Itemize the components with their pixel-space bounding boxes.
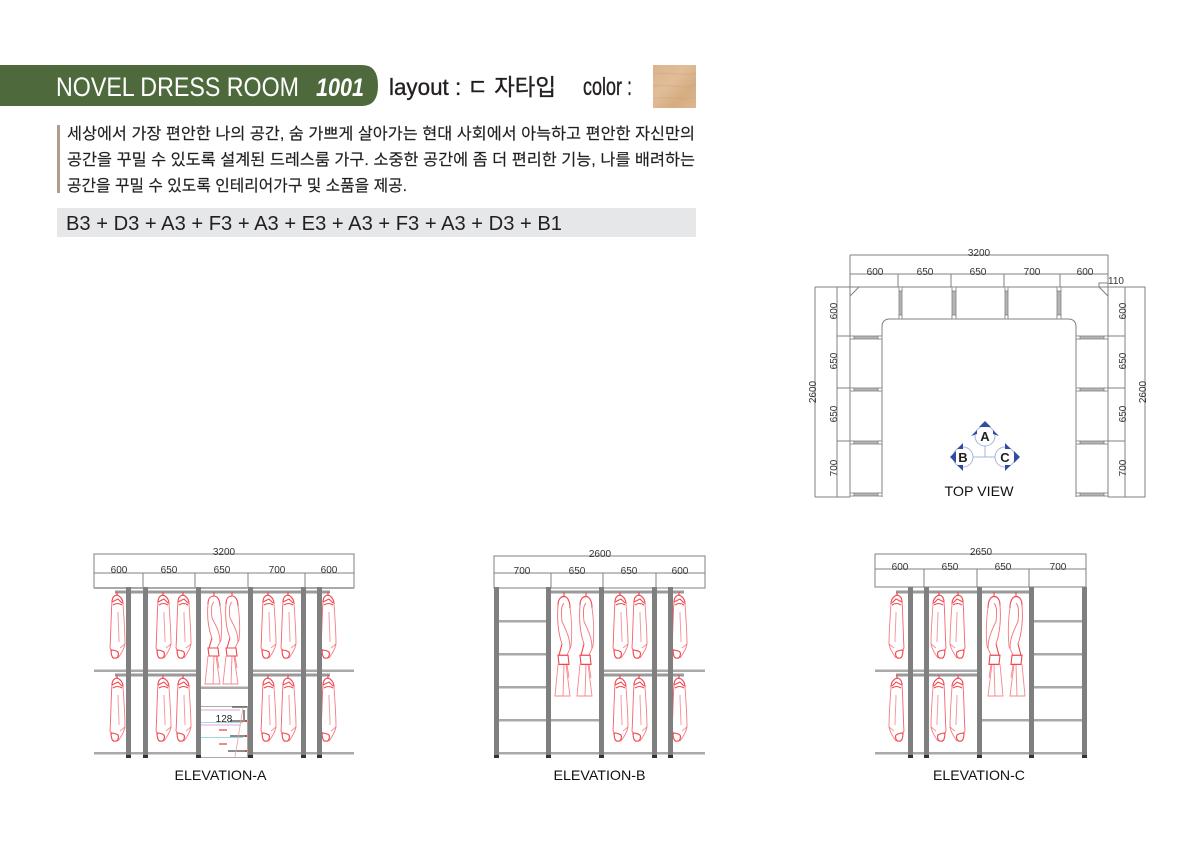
plan partitions <box>853 290 1105 496</box>
top panel with dimensions <box>875 547 1086 587</box>
caption: ELEVATION-A <box>174 767 267 783</box>
plan dimensions: 650 <box>917 267 934 278</box>
plan dimensions: 3200 <box>968 248 991 259</box>
posts <box>126 587 322 758</box>
description block: 공간을 꾸밀 수 있도록 설계된 드레스룸 가구. 소중한 공간에 좀 더 편리한 기능, 나를 배려하는 <box>67 151 695 169</box>
elevation A <box>94 547 354 783</box>
icon: view direction key: A <box>980 429 990 444</box>
color label: color : <box>583 73 632 101</box>
top panel with dimensions: 600 <box>892 562 909 573</box>
description block: 세상에서 가장 편안한 나의 공간, 숨 가쁘게 살아가는 현대 사회에서 아늑하고 편안한 자신만의 <box>67 125 695 143</box>
top panel with dimensions <box>494 549 705 588</box>
header banner <box>0 65 378 106</box>
drawer unit <box>200 706 248 758</box>
plan dimensions: 600 <box>829 302 840 319</box>
icon: view direction key: C <box>1000 450 1010 465</box>
plan dimensions: 600 <box>1077 267 1094 278</box>
module formula bar: B3 + D3 + A3 + F3 + A3 + E3 + A3 + F3 + A3 + D3 + B1 <box>66 213 562 235</box>
module formula bar <box>57 208 696 237</box>
plan dimensions: 110 <box>1108 276 1124 287</box>
drawer unit: 128 <box>216 714 233 725</box>
icon: view direction key <box>950 421 1020 471</box>
plan dimensions: 700 <box>1024 267 1041 278</box>
posts <box>494 587 673 758</box>
shelves and rods <box>494 590 705 754</box>
plan dimensions: 650 <box>1118 352 1129 369</box>
top panel with dimensions: 600 <box>672 566 689 577</box>
top panel with dimensions: 650 <box>569 566 586 577</box>
top panel with dimensions: 650 <box>942 562 959 573</box>
caption: ELEVATION-C <box>933 767 1025 783</box>
plan dimensions: 650 <box>829 352 840 369</box>
plan dimensions: 600 <box>867 267 884 278</box>
plan dimensions: 700 <box>829 459 840 476</box>
top panel with dimensions <box>94 547 354 588</box>
top panel with dimensions: 700 <box>269 565 286 576</box>
plan walls <box>815 255 1145 497</box>
plan dimensions: 2600 <box>1138 380 1149 403</box>
plan dimensions: 650 <box>829 405 840 422</box>
garments <box>110 592 336 741</box>
color swatch: wood <box>653 65 696 108</box>
garments <box>555 592 687 741</box>
shelves and rods <box>94 587 354 754</box>
top panel with dimensions: 700 <box>1050 562 1067 573</box>
top panel with dimensions: 700 <box>514 566 531 577</box>
elevation C <box>875 547 1087 783</box>
layout label: layout : ㄷ 자타입 <box>389 74 556 100</box>
description block <box>57 125 695 195</box>
plan dimensions <box>808 248 1149 476</box>
top panel with dimensions: 600 <box>111 565 128 576</box>
top panel with dimensions: 650 <box>161 565 178 576</box>
top panel with dimensions: 650 <box>214 565 231 576</box>
top view caption: TOP VIEW <box>944 483 1014 499</box>
top panel with dimensions: 650 <box>621 566 638 577</box>
description block: 공간을 꾸밀 수 있도록 인테리어가구 및 소품을 제공. <box>67 177 407 195</box>
model number: 1001 <box>316 74 364 102</box>
plan connectors <box>850 287 1108 496</box>
top panel with dimensions: 2600 <box>589 549 612 560</box>
plan dimensions: 650 <box>1118 405 1129 422</box>
elevation B <box>494 549 705 783</box>
shelves and rods <box>875 590 1084 754</box>
top panel with dimensions: 600 <box>321 565 338 576</box>
garments <box>889 592 1025 741</box>
plan dimensions: 2600 <box>808 380 819 403</box>
top panel with dimensions: 2650 <box>970 547 993 558</box>
posts <box>908 587 1087 758</box>
plan dimensions: 600 <box>1118 302 1129 319</box>
icon: view direction key: B <box>958 450 968 465</box>
caption: ELEVATION-B <box>554 767 646 783</box>
plan dimensions: 650 <box>970 267 987 278</box>
top view plan <box>808 248 1149 499</box>
top panel with dimensions: 650 <box>995 562 1012 573</box>
title: NOVEL DRESS ROOM <box>56 72 299 102</box>
top panel with dimensions: 3200 <box>213 547 236 558</box>
plan dimensions: 700 <box>1118 459 1129 476</box>
